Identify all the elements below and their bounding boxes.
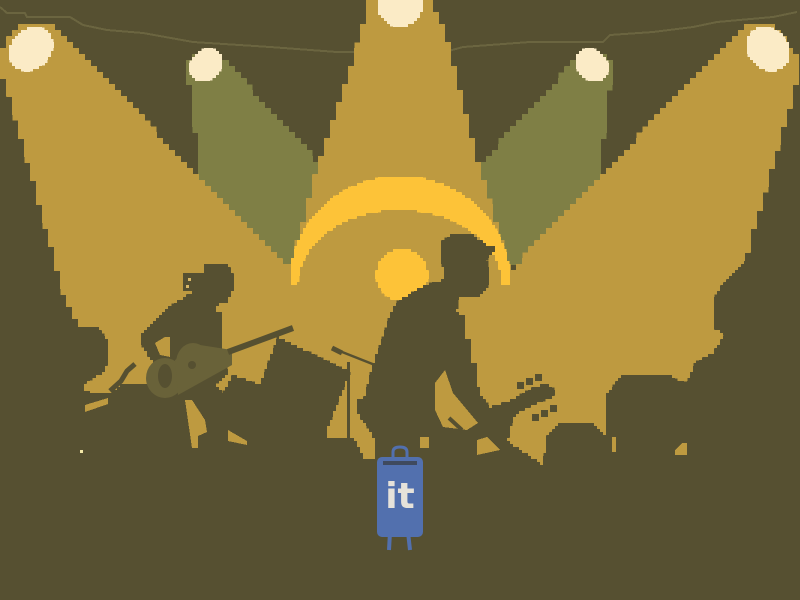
gold sliver: lower left stripe	[85, 398, 108, 412]
acoustic guitar body	[146, 343, 232, 398]
gold gap at guitarist's right arm	[435, 370, 478, 430]
yellow arc behind the singer	[290, 176, 510, 286]
lamp: centre	[377, 0, 423, 27]
tank handle	[393, 447, 407, 458]
electric guitar tuning pegs	[517, 374, 557, 421]
green spotlight beams	[187, 52, 612, 275]
gold gap under the electric guitar	[477, 437, 500, 455]
lamp: far right	[737, 18, 799, 80]
silhouette: stage, amps, audience and guitarist on the right	[0, 200, 800, 600]
gold gap at guitarist's arm	[155, 337, 170, 357]
tank top slot	[383, 461, 417, 465]
gold patch near audience head	[612, 437, 616, 452]
electric guitar neck in the gap	[449, 418, 462, 430]
blue tank "it" logo	[377, 447, 423, 550]
microphone boom	[332, 348, 375, 365]
microphone head	[332, 348, 342, 353]
dreadlock specks	[186, 278, 191, 288]
stage lamps	[0, 0, 799, 88]
lamp: inner left	[183, 42, 229, 88]
lamp: far left	[0, 18, 62, 80]
gold patch by the tank	[420, 437, 429, 448]
acoustic guitar neck	[228, 328, 293, 352]
gold sliver: below amp	[228, 430, 247, 445]
tank label: it	[385, 476, 415, 517]
small white spark	[80, 450, 83, 453]
tambourine stick on the left	[110, 364, 135, 391]
central yellow sun	[376, 249, 428, 301]
tank legs	[389, 532, 410, 550]
gold sliver: beside drum	[185, 400, 207, 448]
lamp: inner right	[569, 42, 615, 88]
microphone stand	[347, 362, 350, 438]
overhead lighting wire	[0, 7, 797, 52]
silhouette: guitarist on the left	[142, 263, 233, 395]
acoustic guitar sound hole	[158, 361, 196, 388]
gold spotlight beams	[0, 0, 798, 470]
tank body	[377, 457, 423, 537]
gold corner in the audience	[675, 443, 687, 455]
